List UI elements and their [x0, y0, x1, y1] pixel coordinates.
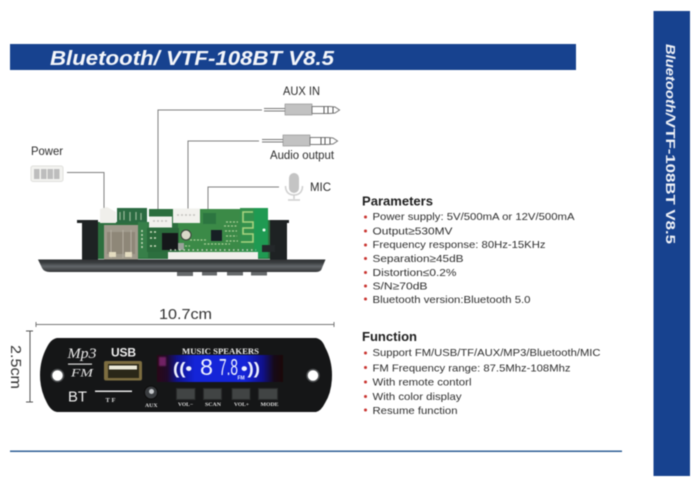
function list: Resume function [372, 405, 458, 417]
side banner [654, 11, 690, 476]
TF slot: TF [106, 397, 116, 404]
button: MODE [258, 388, 279, 408]
width dimension: 10.7cm [159, 306, 212, 323]
USB port [104, 361, 142, 380]
display: ((• [173, 359, 192, 378]
module front panel [40, 338, 332, 412]
parameters list [372, 211, 574, 306]
function list: Support FM/USB/TF/AUX/MP3/Bluetooth/MIC [372, 347, 601, 359]
Mp3 FM logo: Mp3 [66, 346, 96, 362]
ribbon connector [168, 252, 258, 260]
button: MODE: MODE [260, 402, 279, 408]
button: VOL- [176, 388, 195, 408]
parameters list: Separation≥45dB [372, 253, 464, 265]
parameters bullets [364, 216, 367, 300]
height dimension [7, 331, 33, 402]
module photo: side view [38, 207, 326, 276]
AUX IN label: AUX IN [283, 86, 320, 98]
white connectors [100, 207, 116, 223]
silkscreen detail [178, 222, 238, 246]
connection diagram [31, 86, 340, 276]
display: 7.8 [219, 354, 238, 380]
mounting brackets [77, 220, 98, 260]
parameters heading: Parameters [362, 194, 433, 208]
icon: audio jack [262, 135, 338, 146]
button: SCAN: SCAN [205, 402, 221, 408]
button: VOL-: VOL− [178, 402, 193, 408]
height dimension: 2.5cm [7, 345, 24, 389]
width dimension [36, 306, 334, 327]
side banner: VTF-108BT V8.5 [663, 117, 678, 244]
header banner [10, 44, 576, 70]
function bullets [364, 352, 367, 412]
chips [162, 233, 178, 250]
icon: aux jack [264, 104, 340, 115]
AUX socket [144, 386, 158, 409]
audio output label: Audio output [270, 150, 335, 162]
Mp3 FM logo: FM [70, 366, 94, 380]
parameters list: Output≥530MV [372, 226, 452, 238]
icon: battery [31, 166, 63, 182]
parameters list: S/N≥70dB [372, 280, 428, 292]
aux wire [158, 110, 262, 214]
buttons [177, 272, 193, 276]
mounting holes [52, 370, 64, 382]
display: 8 [200, 354, 213, 380]
button: VOL+: VOL+ [234, 402, 249, 408]
AUX socket: AUX [145, 403, 158, 409]
power label: Power [31, 146, 63, 158]
Mp3 FM logo [66, 346, 96, 380]
USB label: USB [111, 346, 136, 360]
display [157, 354, 283, 382]
panel body [40, 338, 332, 412]
function list: With color display [372, 391, 462, 403]
button: SCAN [204, 388, 222, 408]
side banner: Bluetooth/ [663, 44, 678, 119]
panel bar [38, 260, 326, 272]
bottom divider [10, 450, 622, 452]
mic wire [208, 187, 279, 209]
music speakers label: MUSIC SPEAKERS [182, 346, 259, 356]
display: FM [238, 376, 245, 382]
parameters list: Frequency response: 80Hz-15KHz [372, 239, 546, 251]
power wire [67, 172, 104, 212]
parameters list: Distortion≤0.2% [372, 267, 456, 279]
display: •)) [241, 359, 260, 378]
circuit board [98, 208, 270, 259]
function block [362, 329, 601, 417]
function list: With remote contorl [372, 376, 472, 388]
icon: microphone [286, 173, 302, 200]
function list [372, 347, 601, 417]
TF slot [95, 390, 132, 404]
parameters list: Power supply: 5V/500mA or 12V/500mA [372, 211, 574, 223]
header banner: Bluetooth/ VTF-108BT V8.5 [50, 47, 335, 70]
USB socket [104, 225, 138, 260]
antenna [241, 212, 253, 242]
function list: FM Frequency range: 87.5Mhz-108Mhz [372, 362, 570, 374]
button: VOL+ [232, 388, 250, 408]
parameters list: Bluetooth version:Bluetooth 5.0 [372, 294, 531, 306]
BT label: BT [68, 388, 87, 406]
parameters block [362, 194, 574, 306]
audio output wire [188, 141, 259, 210]
MIC label: MIC [310, 182, 331, 194]
function heading: Function [362, 329, 417, 344]
